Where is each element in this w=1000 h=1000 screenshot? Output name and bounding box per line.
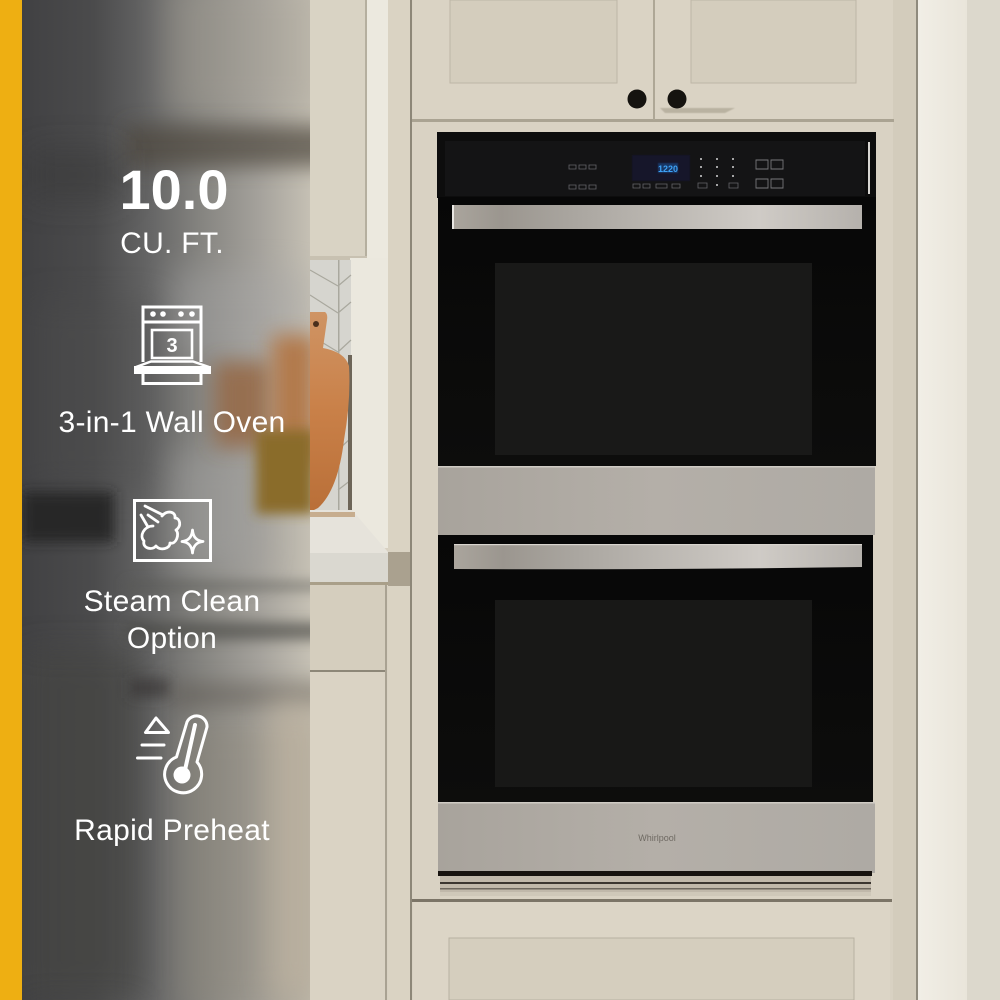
bottom drawer [412, 899, 892, 1000]
label: 3-in-1 wall oven: 3-in-1 Wall Oven [58, 406, 286, 439]
upper cabinet doors [412, 0, 894, 122]
frosted panel [22, 0, 310, 1000]
icon: rapid preheat thermometer [138, 716, 207, 793]
oven surround [412, 122, 893, 900]
upper door [438, 197, 876, 466]
icon: steam clean [134, 500, 210, 560]
label: steam clean option [84, 585, 260, 655]
icon: oven: 3 [166, 335, 178, 357]
bottom steel band [438, 802, 875, 873]
vent [438, 871, 872, 896]
logo: Whirlpool [638, 833, 676, 843]
capacity value: 10.0 [120, 158, 228, 221]
control panel [437, 132, 876, 198]
capacity unit: CU. FT. [120, 227, 224, 260]
control panel: 1220 [658, 164, 678, 174]
lower door [438, 535, 873, 802]
middle steel band [438, 466, 875, 535]
label: rapid preheat: Rapid Preheat [74, 814, 270, 847]
right wall and trim [893, 0, 1000, 1000]
label: steam clean option: Steam Clean [84, 585, 260, 618]
label: steam clean option: Option [127, 622, 217, 655]
icon: oven [134, 307, 211, 384]
double wall oven [437, 132, 876, 896]
yellow accent bar [0, 0, 22, 1000]
left cabinetry [310, 0, 412, 1000]
